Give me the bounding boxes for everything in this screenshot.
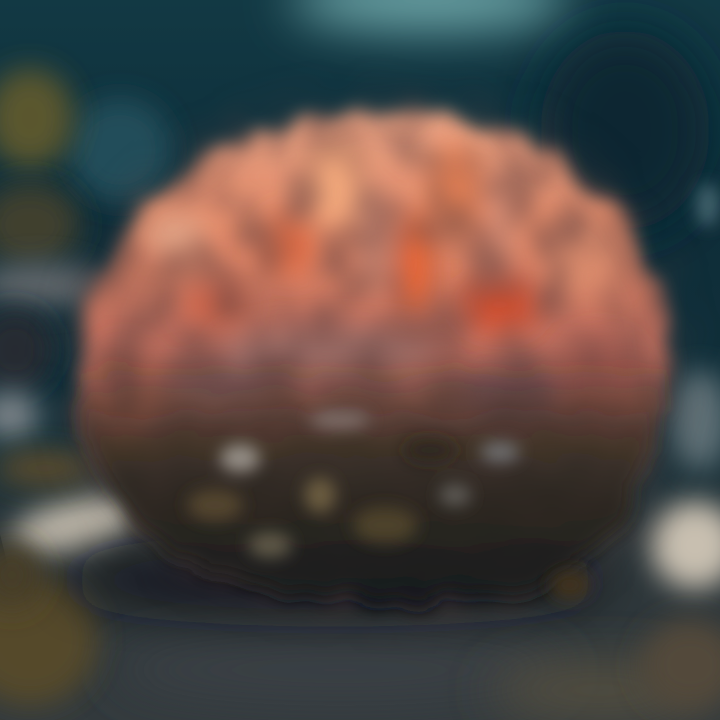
coral body bbox=[70, 102, 678, 606]
left rock column bbox=[0, 68, 102, 706]
coral blotches: surface texture bbox=[70, 102, 678, 606]
right background rocks bbox=[640, 183, 720, 711]
coral lobes: vertical ribs and orange bbox=[143, 140, 623, 331]
coral base: dark shading bbox=[78, 112, 669, 600]
coral mid: muted mauve band bbox=[91, 326, 642, 445]
sand patch right bbox=[651, 501, 720, 589]
coral shadow bbox=[65, 550, 605, 610]
coral base: polyps bbox=[187, 411, 590, 599]
sand patch left bbox=[5, 484, 145, 566]
sea floor bbox=[5, 484, 720, 718]
